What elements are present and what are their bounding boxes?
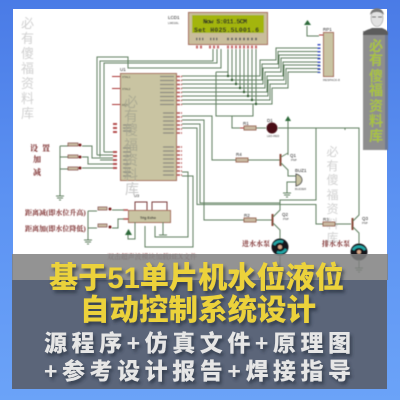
watermark column: top left: 资 bbox=[21, 76, 34, 91]
subtitle bbox=[44, 330, 351, 384]
resistor R4 and transistor Q1 bbox=[236, 152, 297, 176]
strip text: 必 bbox=[369, 38, 383, 54]
watermark column: on U1 bbox=[124, 94, 139, 197]
main title: 基于51单片机水位液位 bbox=[49, 261, 344, 295]
watermark column: on U1: 傻 bbox=[124, 122, 138, 138]
watermark column: on U1: 福 bbox=[124, 137, 138, 153]
buzzer BUZ1 bbox=[283, 168, 307, 197]
watermark column: right: 傻 bbox=[326, 173, 339, 187]
resistor R3 and transistor Q3 bbox=[323, 210, 369, 244]
resistor R4 and transistor Q1: R4 bbox=[236, 152, 242, 157]
wires: data bus to LCD and RP1 bbox=[182, 48, 320, 128]
strip text: 库 bbox=[369, 128, 383, 144]
pump motor: inlet bbox=[272, 238, 288, 256]
LCD label: LCD1 bbox=[168, 15, 180, 20]
watermark column: top left: 有 bbox=[21, 31, 34, 46]
resistor R4 and transistor Q1: Q1 bbox=[290, 153, 297, 158]
resistor R2 and transistor Q2: R2 bbox=[244, 213, 250, 218]
resistor R1 and LED D1: R1 bbox=[243, 121, 249, 126]
icon: portrait bbox=[363, 8, 388, 35]
resistor pack RP1: RESPACK-8 bbox=[323, 78, 340, 82]
pump motor: drain bbox=[350, 244, 368, 260]
label: set add subtract: 设置 bbox=[30, 143, 54, 153]
watermark column: right: 有 bbox=[326, 159, 339, 173]
main title: 自动控制系统设计 bbox=[80, 293, 316, 327]
resistor R2 and transistor Q2: PNP bbox=[283, 217, 289, 221]
distance switches bbox=[84, 207, 167, 244]
subtitle: 源程序+仿真文件+原理图 bbox=[44, 330, 351, 356]
label: set add subtract bbox=[30, 143, 54, 177]
wires: LCD control lines bbox=[97, 49, 221, 160]
strip text: 福 bbox=[369, 82, 383, 98]
watermark column: right: 福 bbox=[326, 187, 339, 202]
subtitle: +参考设计报告+焊接指导 bbox=[44, 358, 351, 384]
resistor R2 and transistor Q2 bbox=[244, 200, 289, 240]
watermark column: on U1: 有 bbox=[124, 108, 138, 124]
resistor R3 and transistor Q3: R3 bbox=[323, 217, 329, 222]
right promo strip bbox=[363, 8, 388, 150]
label: drain pump: 排水水泵 bbox=[322, 239, 350, 248]
microcontroller U1: U1 bbox=[120, 67, 126, 72]
label: set add subtract: 减 bbox=[33, 167, 41, 177]
junction dots bbox=[227, 75, 257, 105]
watermark column: on U1: 资 bbox=[124, 152, 138, 168]
resistor R1 and LED D1: D1 bbox=[267, 118, 273, 123]
microcontroller U1: RST bbox=[122, 103, 128, 107]
watermark column: top left: 傻 bbox=[21, 46, 34, 61]
strip text: 傻 bbox=[369, 68, 383, 84]
overlay: title band translucent bbox=[12, 254, 388, 280]
watermark column: top left: 库 bbox=[21, 106, 34, 121]
label: set add subtract: 加 bbox=[33, 154, 41, 164]
watermark column: on U1: 必 bbox=[124, 94, 138, 110]
LCD display module: Now S:011.5CM bbox=[203, 18, 247, 26]
label: distance minus: 距离减(即水位升高) bbox=[25, 208, 86, 217]
buzzer BUZ1: BUZZER bbox=[295, 187, 306, 191]
microcontroller U1: XTAL2 bbox=[122, 87, 131, 91]
ground symbols below pumps bbox=[276, 255, 363, 272]
resistor R1 and LED D1 bbox=[240, 116, 359, 210]
strip text: 料 bbox=[369, 113, 383, 129]
resistor pack RP1 bbox=[319, 27, 340, 82]
watermark column: top left: 料 bbox=[21, 91, 34, 106]
caption under overlay: 双击超声波模块加载HEX文件 bbox=[107, 252, 197, 261]
strip text bbox=[369, 38, 383, 144]
watermark column: top left: 必 bbox=[21, 16, 34, 31]
buzzer BUZ1: BUZ1 bbox=[295, 168, 307, 173]
resistor pack RP1: RP1 bbox=[323, 27, 332, 32]
LCD display module bbox=[188, 12, 268, 47]
watermark column: top left: 福 bbox=[21, 61, 34, 76]
strip text: 有 bbox=[369, 52, 383, 68]
microcontroller U1 bbox=[112, 67, 182, 180]
label: distance plus: 距离加(即水位降低) bbox=[25, 224, 86, 233]
watermark column: right: 料 bbox=[326, 217, 339, 231]
watermark column: top left bbox=[21, 16, 34, 121]
power symbol to RP1 bbox=[304, 20, 319, 36]
resistor R1 and LED D1: LED-RED bbox=[267, 134, 279, 138]
keypad switches: set, add, subtract bbox=[56, 143, 113, 200]
wires: port lines on right of U1 bbox=[145, 116, 323, 247]
watermark column: right: 库 bbox=[326, 230, 339, 245]
overlay: bottom dark panel bbox=[12, 280, 387, 389]
watermark column: right: 资 bbox=[326, 202, 339, 216]
ultrasonic module U3 bbox=[123, 193, 170, 222]
resistor R3 and transistor Q3: PNP bbox=[362, 221, 368, 225]
microcontroller U1: XTAL1 bbox=[122, 75, 131, 79]
main title bbox=[49, 261, 344, 327]
LCD label: LM016L bbox=[168, 21, 179, 25]
resistor R4 and transistor Q1: PNP bbox=[291, 158, 297, 162]
LCD display module: Set H025.5L001.6 bbox=[194, 27, 259, 34]
ultrasonic module U3: Trig Echo bbox=[140, 216, 156, 220]
watermark column: on U1: 库 bbox=[125, 181, 139, 197]
strip text: 资 bbox=[369, 98, 383, 114]
label: inlet pump: 进水水泵 bbox=[242, 239, 270, 248]
watermark column: right: 必 bbox=[326, 145, 339, 159]
watermark column: right bbox=[326, 145, 339, 245]
LCD label bbox=[168, 15, 180, 25]
watermark column: on U1: 料 bbox=[124, 167, 138, 183]
circuit schematic bbox=[21, 12, 369, 272]
ultrasonic module U3: U3 bbox=[134, 193, 140, 198]
resistor R2 and transistor Q2: Q2 bbox=[282, 212, 289, 217]
resistor R3 and transistor Q3: Q3 bbox=[362, 216, 369, 221]
